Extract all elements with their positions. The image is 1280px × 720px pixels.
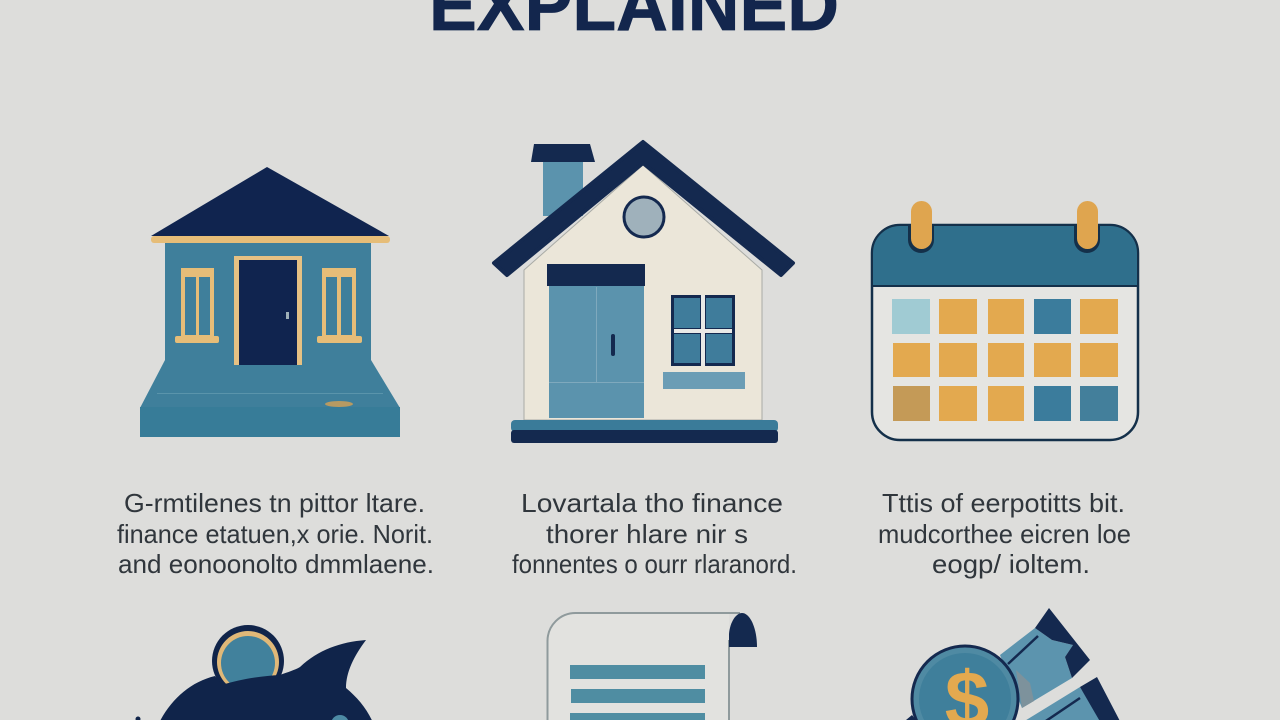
icon: house xyxy=(494,142,793,443)
icon: coin and banknotes xyxy=(900,608,1122,720)
icon: document scroll xyxy=(547,613,757,720)
text block: center column xyxy=(512,488,797,579)
text block: left column: G-rmtilenes tn pittor ltare. xyxy=(124,488,425,518)
calendar date grid xyxy=(892,299,1118,421)
text block: right column: Tttis of eerpotitts bit. xyxy=(882,488,1125,518)
text block: right column: eogp/ ioltem. xyxy=(932,549,1090,579)
text block: left column: and eonoonolto dmmlaene. xyxy=(118,549,434,579)
text block: center column: thorer hlare nir s xyxy=(546,519,748,549)
text block: center column: Lovartala tho finance xyxy=(521,488,783,518)
icon: calendar xyxy=(872,201,1138,440)
icon: bank building xyxy=(140,167,400,437)
text block: left column: finance etatuen,x orie. Norit. xyxy=(117,519,433,549)
text block: right column: mudcorthee eicren loe xyxy=(878,519,1131,549)
text block: right column xyxy=(878,488,1131,579)
text block: left column xyxy=(117,488,434,579)
icon: piggy bank xyxy=(136,625,374,720)
scroll text lines xyxy=(570,665,705,720)
text block: center column: fonnentes o ourr rlaranord. xyxy=(512,549,797,579)
